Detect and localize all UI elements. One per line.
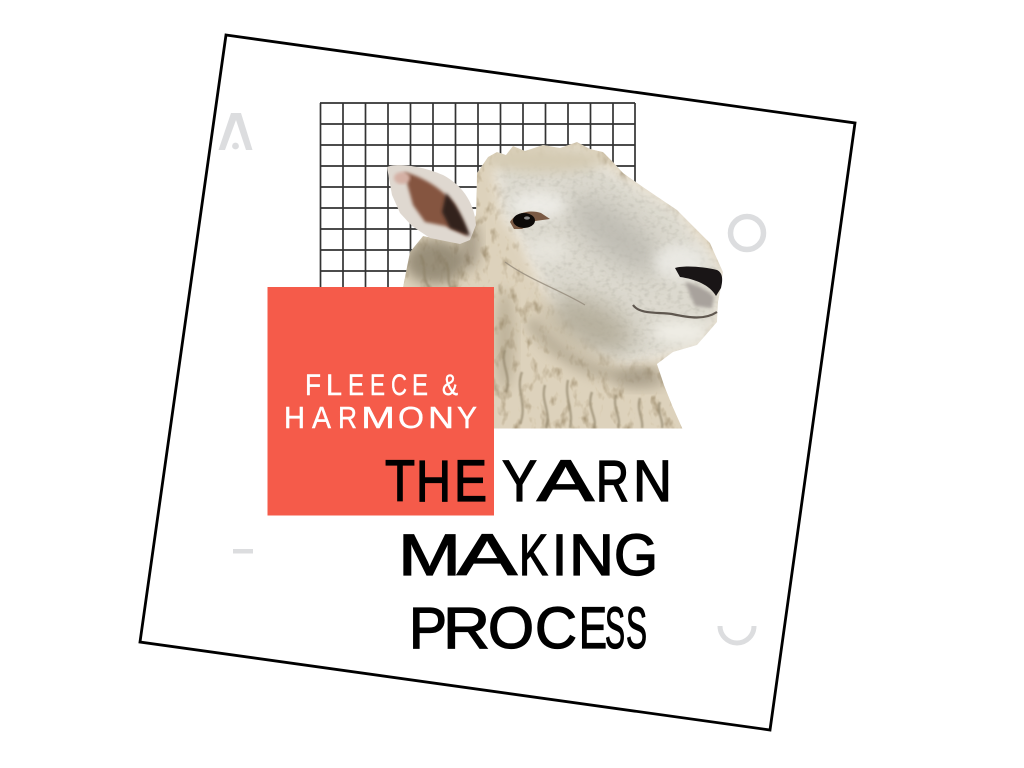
title — [385, 449, 672, 661]
title: K — [519, 523, 548, 588]
wool tufts — [420, 255, 662, 428]
logo: Fleece & Harmony: C — [391, 369, 407, 402]
title: S — [605, 596, 625, 661]
icon: ring — [730, 216, 764, 250]
sheep eye — [510, 211, 550, 229]
logo: Fleece & Harmony: L — [326, 369, 342, 402]
title: A — [457, 523, 517, 588]
logo panel — [268, 287, 494, 516]
logo: Fleece & Harmony — [284, 369, 477, 435]
title: Y — [502, 449, 537, 514]
sheep mouth — [633, 305, 717, 318]
logo: Fleece & Harmony: M — [361, 400, 395, 435]
title: N — [633, 449, 672, 514]
sheep wool and head silhouette — [400, 142, 723, 432]
icon: dash — [233, 549, 253, 554]
title: R — [443, 596, 490, 661]
title: E — [579, 596, 607, 661]
logo: Fleece & Harmony: Y — [457, 400, 477, 435]
sheep shading — [405, 148, 723, 428]
logo: Fleece & Harmony: H — [284, 400, 305, 435]
sheep ear — [387, 165, 476, 244]
title: S — [626, 596, 647, 661]
logo: Fleece & Harmony: & — [442, 369, 458, 402]
title: G — [614, 523, 658, 588]
title: I — [552, 523, 567, 588]
logo: Fleece & Harmony: E — [348, 369, 364, 402]
logo: Fleece & Harmony: F — [305, 369, 321, 402]
background frame card — [140, 35, 855, 730]
title: A — [537, 449, 594, 514]
title: H — [416, 449, 451, 514]
grid pattern — [320, 103, 635, 288]
title: T — [385, 449, 415, 514]
logo: Fleece & Harmony: R — [338, 400, 357, 435]
logo: Fleece & Harmony: E — [370, 369, 385, 402]
title: M — [398, 523, 461, 588]
logo: Fleece & Harmony: N — [428, 400, 454, 435]
logo: Fleece & Harmony: E — [412, 369, 428, 402]
sheep nose — [675, 267, 722, 308]
logo: Fleece & Harmony: A — [312, 400, 331, 435]
title: E — [454, 449, 487, 514]
icon: half ring — [720, 626, 754, 643]
title: C — [535, 596, 577, 661]
icon: letter A shape — [218, 113, 252, 150]
title: O — [488, 596, 534, 661]
title: R — [596, 449, 629, 514]
title: N — [569, 523, 614, 588]
logo: Fleece & Harmony: O — [398, 400, 424, 435]
title: P — [409, 596, 447, 661]
sheep illustration — [387, 142, 723, 432]
